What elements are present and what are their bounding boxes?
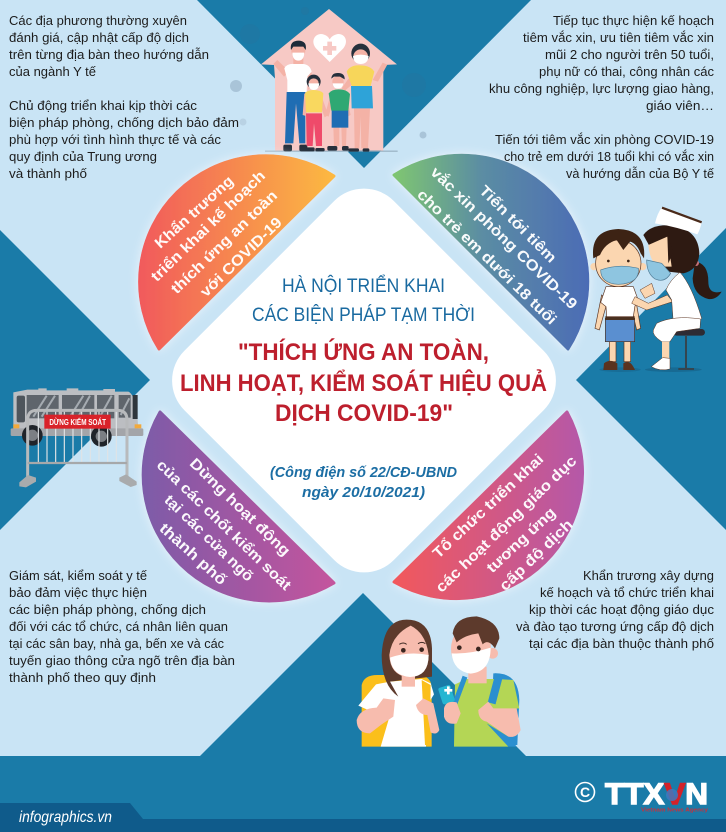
text block: top right: và hướng dẫn của Bộ Y tế — [566, 166, 715, 181]
text block: bottom right — [516, 568, 715, 651]
center white diamond — [155, 171, 573, 590]
logo: TTXVN: TTXVN — [605, 778, 708, 811]
text block: bottom left — [9, 568, 235, 685]
document reference — [270, 464, 457, 501]
text block: top left: Chủ động triển khai kịp thời các — [9, 98, 197, 113]
icon: bus and checkpoint barrier: DỪNG KIỂM SOÁT — [49, 416, 106, 427]
text block: top right: phụ nữ có thai, công nhân các — [539, 64, 714, 79]
petal: blue green: Tiến tới tiêm — [476, 182, 560, 266]
text block: top left — [9, 13, 239, 181]
petal: blue green: vắc xin phòng COVID-19 — [427, 163, 581, 313]
text block: top left: biện pháp phòng, chống dịch bảo đảm — [9, 115, 239, 130]
logo: TTXVN: C — [580, 784, 590, 800]
petal: orange: Khẩn trương — [151, 173, 237, 252]
text block: bottom left: đối với các tổ chức, cá nhân liên quan — [9, 619, 228, 634]
text block: top left: của ngành Y tế — [9, 64, 97, 79]
text block: top left: Các địa phương thường xuyên — [9, 13, 187, 28]
girl — [362, 675, 432, 747]
text block: bottom right: Khẩn trương xây dựng — [583, 568, 714, 583]
document reference: ngày 20/10/2021) — [302, 484, 425, 501]
title: DỊCH COVID-19" — [275, 400, 453, 427]
text block: top right — [489, 13, 715, 181]
text block: bottom right: kế hoạch và tổ chức triển khai — [540, 585, 714, 600]
icon: students with masks — [357, 616, 521, 747]
text block: top right: Tiếp tục thực hiện kế hoạch — [553, 13, 714, 28]
petal: pink: tương ứng — [483, 504, 559, 577]
text block: bottom right: tại các địa bàn thuộc thành phố — [529, 636, 715, 651]
footer band — [0, 803, 726, 832]
text block: top right: giáo viên… — [646, 98, 714, 113]
title: LINH HOẠT, KIỂM SOÁT HIỆU QUẢ — [180, 368, 547, 397]
text block: bottom left: Giám sát, kiểm soát y tế — [9, 568, 148, 583]
text block: bottom left: tuyến giao thông cửa ngõ trên địa bàn — [9, 653, 235, 668]
text block: top left: quy định của Trung ương — [9, 149, 157, 164]
icon: family in house — [261, 9, 398, 152]
heading: subtitle — [252, 274, 475, 326]
petal: blue green: cho trẻ em dưới 18 tuổi — [413, 186, 560, 328]
boy — [595, 295, 607, 330]
text block: top left: đánh giá, cập nhật cấp độ dịch — [9, 30, 189, 45]
petal: purple: của các chốt kiểm soát — [153, 457, 294, 594]
text block: top right: Tiến tới tiêm vắc xin phòng COVID-19 — [495, 132, 714, 147]
father — [273, 60, 289, 77]
petal: purple: Dừng hoạt động — [186, 455, 293, 560]
boy — [325, 97, 333, 117]
petal: orange: với COVID-19 — [197, 214, 286, 301]
petal: pink: cấp độ dịch — [496, 516, 576, 594]
document reference: (Công điện số 22/CĐ-UBND — [270, 464, 457, 481]
text block: top left: trên từng địa bàn theo hướng dẫn — [9, 47, 209, 62]
text block: top right: mũi 2 cho người trên 50 tuổi, — [545, 47, 714, 62]
petal: orange: thích ứng an toàn — [168, 187, 281, 297]
text block: top right: cho trẻ em dưới 18 tuổi khi có vắc xin — [504, 149, 714, 164]
text block: bottom left: các biện pháp phòng, chống dịch — [9, 602, 206, 617]
text block: bottom left: thành phố theo quy định — [9, 670, 156, 685]
text block: bottom right: và đào tạo tương ứng cấp độ dịch — [516, 619, 714, 634]
petal: orange — [140, 156, 334, 349]
nurse — [677, 322, 702, 342]
petal: blue green — [394, 155, 588, 349]
title — [180, 338, 547, 427]
text block: top left: phù hợp với tình hình thực tế và các — [9, 132, 221, 147]
text block: bottom right: kịp thời các hoạt động giáo dục — [529, 602, 714, 617]
petal: orange: triển khai kế hoạch — [148, 167, 269, 285]
heading: subtitle: HÀ NỘI TRIỂN KHAI — [282, 274, 445, 297]
text block: top left: và thành phố — [9, 166, 88, 181]
boy — [490, 673, 519, 745]
icon: bus and checkpoint barrier — [11, 388, 143, 487]
text block: top right: khu công nghiệp, lực lượng giao hàng, — [489, 81, 714, 96]
icon: nurse vaccinating boy — [590, 208, 722, 372]
text block: top right: tiêm vắc xin, ưu tiên tiêm vắc xin — [523, 30, 714, 45]
petal: pink: Tổ chức triển khai — [430, 451, 547, 562]
heading: subtitle: CÁC BIỆN PHÁP TẠM THỜI — [252, 303, 475, 326]
logo: TTXVN: Vietnam News Agency — [641, 808, 709, 814]
mother — [373, 63, 387, 82]
title: "THÍCH ỨNG AN TOÀN, — [238, 338, 489, 366]
petal: pink: các hoạt động giáo dục — [432, 453, 580, 596]
source label: infographics.vn — [19, 809, 112, 826]
petal: purple: tại các cửa ngõ — [161, 492, 257, 585]
girl — [303, 93, 309, 116]
petal: purple: thành phố — [156, 520, 230, 589]
text block: bottom left: bảo đảm việc thực hiện — [9, 585, 147, 600]
petal: pink — [394, 412, 583, 599]
text block: bottom left: tại các sân bay, nhà ga, bến xe và các — [9, 636, 224, 651]
petal: purple — [143, 412, 334, 601]
